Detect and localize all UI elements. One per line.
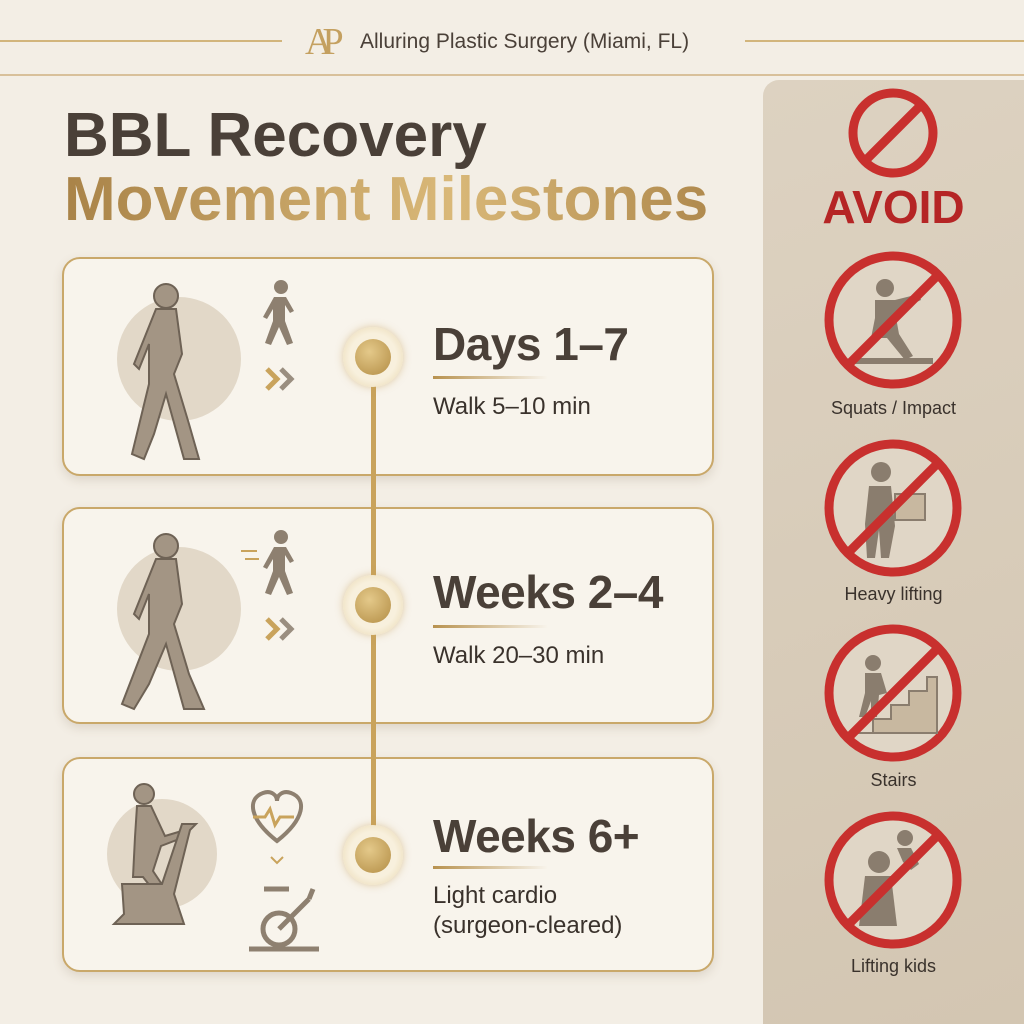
title (64, 101, 708, 234)
milestone 1 text: Days 1–7 (433, 318, 628, 370)
text: Light cardio (433, 882, 557, 909)
text: Squats / Impact (831, 398, 956, 418)
milestone 2 text: Weeks 2–4 (433, 566, 663, 618)
text: Heavy lifting (844, 584, 943, 604)
text: Walk 20–30 min (433, 642, 604, 669)
text: Walk 5–10 min (433, 393, 591, 420)
text: Lifting kids (851, 956, 936, 976)
text: Stairs (870, 770, 916, 790)
figure 2 (117, 533, 241, 710)
text: (surgeon-cleared) (433, 912, 622, 939)
header (0, 21, 1024, 76)
avoid: heavy lifting (824, 440, 962, 576)
card 2 (62, 507, 714, 724)
icon runner (241, 530, 294, 641)
avoid header icon (848, 88, 938, 178)
icon walker + chevrons (263, 280, 294, 391)
card 3 (62, 757, 714, 972)
brand text: Alluring Plastic Surgery (Miami, FL) (360, 30, 689, 53)
timeline line (371, 380, 376, 850)
avoid: lifting kids (824, 812, 962, 948)
heart icon + bike (249, 790, 319, 952)
avoid: squats (824, 252, 962, 388)
timeline dots (343, 327, 403, 387)
logo: AP (305, 21, 334, 63)
bike figure (107, 783, 217, 925)
right panel: avoid (763, 80, 1024, 1024)
card 1 (62, 257, 714, 476)
avoid title: AVOID (822, 181, 965, 233)
title: BBL Recovery (64, 101, 487, 170)
title: Movement Milestones (64, 165, 708, 234)
milestone 3 text: Weeks 6+ (433, 810, 639, 862)
figure 1 (117, 283, 241, 460)
avoid: stairs (824, 624, 962, 762)
